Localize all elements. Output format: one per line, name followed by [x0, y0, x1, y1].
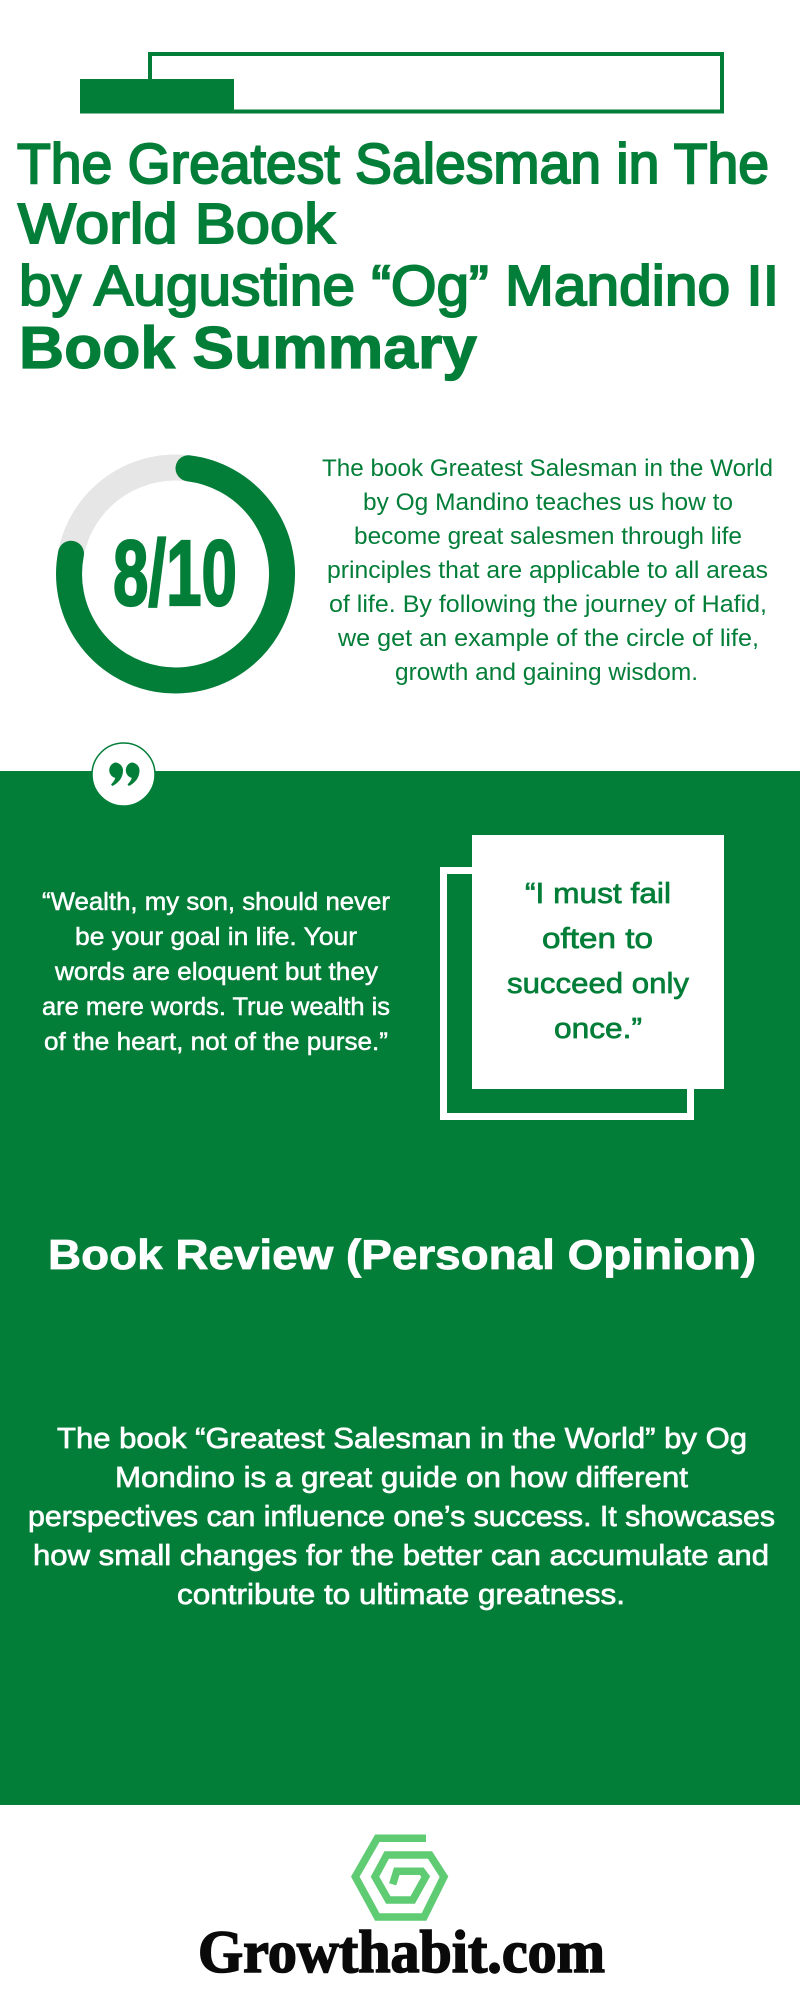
review paragraph: contribute to ultimate greatness. — [177, 1579, 625, 1611]
brand name: Growthabit.com — [198, 1919, 605, 1985]
callout: quote card: succeed only — [507, 968, 690, 1000]
header decoration: outlined bar with solid tab — [80, 54, 722, 114]
callout: quote card — [444, 835, 724, 1116]
title: by Augustine “Og” Mandino II — [19, 254, 779, 318]
title — [17, 132, 779, 381]
icon: growthabit hexagon spiral logo — [355, 1838, 444, 1917]
callout: quote card: “I must fail — [525, 878, 671, 910]
quote: wealth — [42, 888, 390, 1056]
quote: wealth: “Wealth, my son, should never — [42, 888, 390, 916]
quote: wealth: are mere words. True wealth is — [42, 993, 390, 1021]
callout: quote card: often to — [542, 923, 653, 955]
quote: wealth: be your goal in life. Your — [75, 923, 357, 951]
summary paragraph — [322, 455, 773, 686]
summary paragraph: become great salesmen through life — [354, 523, 742, 550]
title: The Greatest Salesman in The — [17, 132, 769, 196]
summary paragraph: of life. By following the journey of Hafid, — [329, 591, 767, 618]
panel: green band — [0, 771, 800, 1805]
review paragraph: perspectives can influence one’s success. It showcases — [28, 1501, 775, 1533]
review paragraph: The book “Greatest Salesman in the World” by Og — [57, 1423, 747, 1455]
review paragraph: how small changes for the better can accumulate and — [33, 1540, 769, 1572]
summary paragraph: by Og Mandino teaches us how to — [363, 489, 733, 516]
rating ring: 8/10 — [69, 468, 282, 681]
icon: quotation mark badge — [92, 743, 155, 806]
summary paragraph: principles that are applicable to all areas — [327, 557, 768, 584]
heading: book review: Book Review (Personal Opinion) — [48, 1231, 756, 1278]
callout: quote card: once.” — [554, 1013, 642, 1045]
title: World Book — [18, 192, 336, 256]
quote: wealth: words are eloquent but they — [54, 958, 379, 986]
rating ring: 8/10: 8/10 — [113, 521, 237, 625]
summary paragraph: growth and gaining wisdom. — [395, 659, 698, 686]
summary paragraph: The book Greatest Salesman in the World — [322, 455, 773, 482]
review paragraph: Mondino is a great guide on how different — [115, 1462, 688, 1494]
summary paragraph: we get an example of the circle of life, — [337, 625, 759, 652]
quote: wealth: of the heart, not of the purse.” — [44, 1028, 388, 1056]
title: Book Summary — [19, 315, 477, 381]
review paragraph — [28, 1423, 775, 1611]
